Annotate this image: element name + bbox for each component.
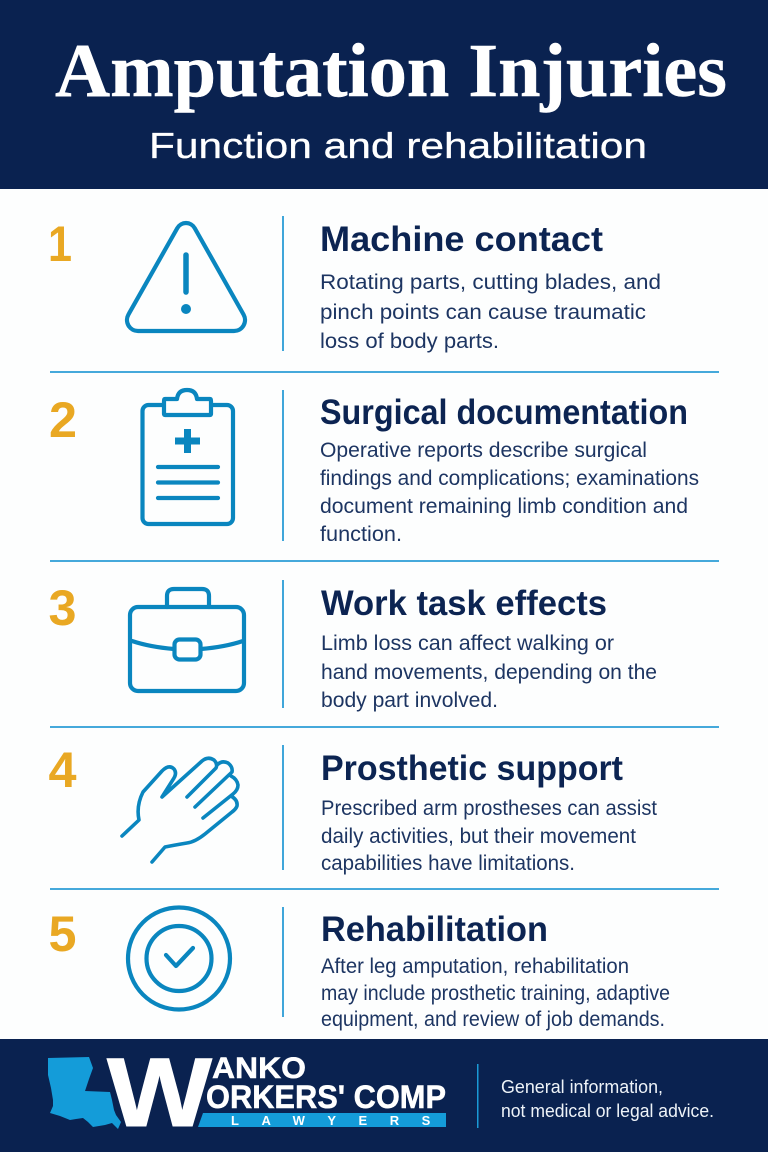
logo band: LAWYERS: LAWYERS xyxy=(231,1113,453,1128)
body text: hand movements, depending on the xyxy=(321,661,657,684)
body text xyxy=(321,632,657,712)
icon: hand xyxy=(122,758,238,862)
logo xyxy=(48,1038,453,1147)
body text xyxy=(321,955,670,1031)
body text: function. xyxy=(320,523,402,546)
icon: briefcase xyxy=(130,589,244,691)
icon: target check xyxy=(128,908,230,1010)
body text: document remaining limb condition and xyxy=(320,495,688,518)
body text: Rotating parts, cutting blades, and xyxy=(320,271,661,294)
body text xyxy=(321,797,657,875)
body text: Prescribed arm prostheses can assist xyxy=(321,797,657,820)
icon: Louisiana state shape xyxy=(48,1057,121,1129)
footer divider xyxy=(477,1064,478,1128)
panel: machine contact xyxy=(48,216,661,353)
number 3: 3 xyxy=(48,580,76,636)
body text: Limb loss can affect walking or xyxy=(321,632,614,655)
body text xyxy=(320,439,699,546)
number 1: 1 xyxy=(48,216,72,272)
logo word: ANKO: ANKO xyxy=(212,1052,306,1085)
body text: loss of body parts. xyxy=(320,330,499,353)
panel: work task effects xyxy=(48,580,657,712)
body text: may include prosthetic training, adaptive xyxy=(321,982,670,1005)
body text: body part involved. xyxy=(321,689,498,712)
heading: Machine contact xyxy=(320,219,603,259)
body text: After leg amputation, rehabilitation xyxy=(321,955,629,978)
header banner xyxy=(0,0,768,189)
disclaimer: General information, xyxy=(501,1077,663,1097)
panel: rehabilitation xyxy=(48,906,670,1031)
body text: Operative reports describe surgical xyxy=(320,439,647,462)
disclaimer: not medical or legal advice. xyxy=(501,1101,714,1121)
title: Amputation Injuries xyxy=(55,29,727,113)
footer banner xyxy=(0,1038,768,1152)
logo word: W: W xyxy=(107,1038,213,1147)
number 5: 5 xyxy=(48,906,76,962)
body text: capabilities have limitations. xyxy=(321,852,575,875)
subtitle: Function and rehabilitation xyxy=(149,125,647,166)
number 2: 2 xyxy=(49,392,77,448)
panel: surgical documentation xyxy=(49,390,699,546)
disclaimer xyxy=(501,1077,714,1121)
heading: Surgical documentation xyxy=(320,392,688,432)
panel: prosthetic support xyxy=(48,742,657,875)
body text: pinch points can cause traumatic xyxy=(320,301,646,324)
heading: Rehabilitation xyxy=(321,909,548,949)
body text: equipment, and review of job demands. xyxy=(321,1008,665,1031)
body text xyxy=(320,271,661,353)
heading: Prosthetic support xyxy=(321,748,623,788)
body text: daily activities, but their movement xyxy=(321,825,636,848)
icon: warning triangle xyxy=(127,223,245,331)
body text: findings and complications; examinations xyxy=(320,467,699,490)
logo word: WORKERS' COMP: ORKERS' COMP xyxy=(206,1079,446,1115)
heading: Work task effects xyxy=(321,583,607,623)
number 4: 4 xyxy=(48,742,77,798)
icon: clipboard xyxy=(142,390,233,524)
